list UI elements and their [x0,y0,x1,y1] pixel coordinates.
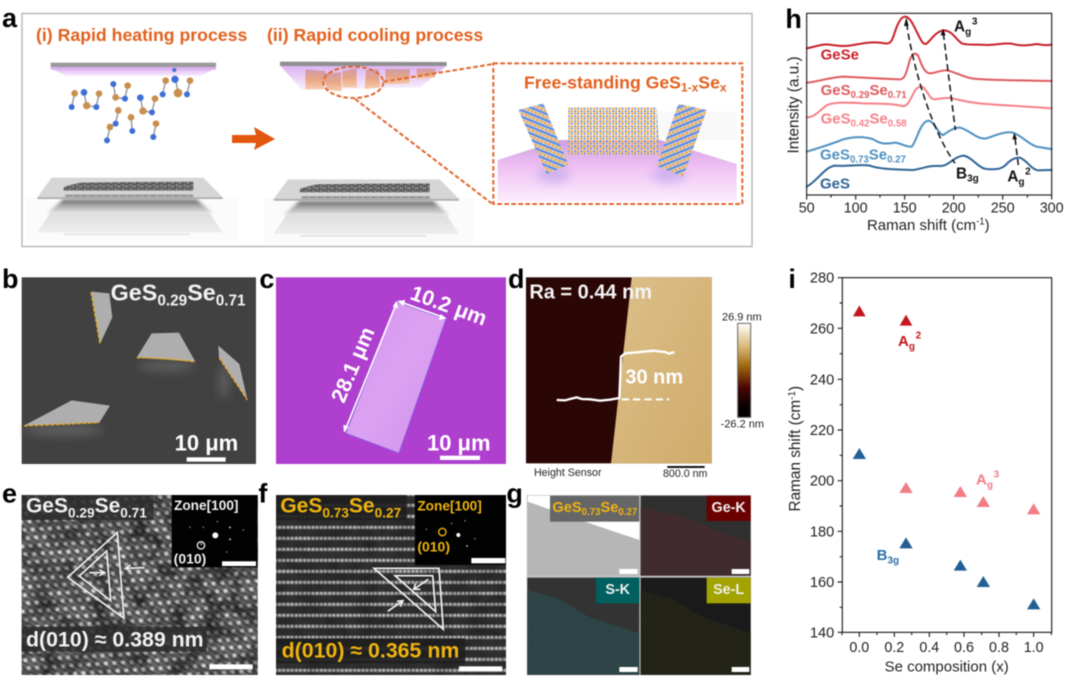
panel: i Raman shift vs composition [787,264,1052,676]
lower substrate with powder [264,179,474,243]
diffraction inset: (010) [417,539,450,555]
map: STEM image: 0.27 [618,507,637,518]
panel h letter: h [785,4,802,34]
series labels: GeS [821,110,851,127]
backdrop and separators [527,495,751,675]
y tick labels: 240 [810,372,834,388]
composition label: GeS [280,495,322,518]
scale bar [187,457,226,462]
composition label: 0.71 [216,293,246,310]
series labels: Se [869,146,887,163]
mode labels: A [1007,169,1018,186]
panel e letter: e [2,479,17,509]
series labels: GeS [820,175,850,192]
cooling stage illustration [264,62,742,243]
composition label: GeS [111,280,157,306]
composition label: 0.73 [322,505,349,520]
length label: 28.1 μm [326,324,380,406]
label: Ag2: g [909,341,915,352]
lattice flake right [657,104,707,177]
top substrate with flakes [280,62,447,91]
series labels: 0.29 [851,90,870,101]
panel: e HRTEM image [2,479,258,675]
step label: 30 nm [625,366,683,388]
y axis title: Intensity (a.u.) [785,56,802,154]
diffraction inset: Zone[100] [417,499,482,514]
curve: GeS0.73Se0.27 [807,121,1052,152]
panel a letter: a [2,3,18,33]
inset title: Free-standing GeS [524,72,681,92]
y tick labels: 280 [810,271,834,287]
x tick labels: 1.0 [1024,640,1044,656]
scale bar [209,664,253,669]
colour bar: 26.9 nm [722,312,762,324]
optical background [276,277,506,464]
diffraction inset: (010) [174,550,206,566]
x tick labels: 150 [893,201,917,217]
series labels: 0.73 [850,154,869,165]
y tick labels: 220 [810,423,834,439]
label: Ag2: A [898,333,909,350]
composition label: 0.71 [120,505,147,520]
heading: rapid heating: (i) Rapid heating process [36,25,247,45]
x tick labels: 0.6 [954,640,974,656]
panel g letter: g [506,479,523,509]
label: Ag3: g [987,480,993,491]
composition label: 0.27 [375,505,401,520]
triangle markers [374,568,443,629]
peak-shift dashed guides [907,23,1018,165]
inset title: x [720,81,727,95]
molecules [69,68,193,143]
x tick labels: 0.8 [989,640,1009,656]
panel f letter: f [258,478,268,508]
label: B3g: B [877,547,887,564]
panel: b SEM image [2,264,256,464]
panel: a [2,3,752,246]
mode labels: A [954,19,965,36]
mode labels [954,16,1031,188]
series labels: GeS [821,82,851,99]
diffraction inset [415,495,506,565]
y tick labels: 260 [810,321,834,337]
series labels [820,46,907,192]
composition label [22,495,153,520]
panel a frame [22,14,752,246]
curve: GeS [807,156,1052,187]
series labels: 0.42 [851,118,869,129]
x tick labels: 300 [1040,201,1064,217]
x tick labels [799,201,1064,217]
panel: g EDS maps [506,479,751,675]
top substrate [51,63,216,76]
inset title: 1-x [681,81,699,95]
scale label: 10 μm [427,431,491,456]
y tick labels: 180 [810,524,834,540]
curve: GeSe [807,17,1052,48]
inset backdrop [657,112,737,140]
SEM background [22,277,256,464]
flake tan region [611,277,712,463]
flake reflections [537,167,685,183]
series: B3g markers [853,448,1040,609]
scale bar [459,666,502,671]
flakes [24,292,247,426]
x axis title: Raman shift (cm [867,217,976,234]
x tick labels: 200 [942,201,966,217]
x axis title: -1 [976,217,985,228]
x tick labels: 0.4 [919,640,939,656]
panel b letter: b [2,264,18,294]
height trace [557,351,674,401]
label: Ag2: 2 [916,331,922,342]
mode labels: 3 [972,16,978,27]
label: Ag3: A [976,472,987,489]
series: Ag2 markers [853,305,912,326]
composition label: 0.29 [157,293,187,310]
diffraction inset: Zone[100] [174,498,239,513]
series labels: 0.71 [888,90,907,101]
heating stage illustration [27,63,237,242]
yellow dashed edges [24,292,247,426]
composition label: Se [95,495,120,518]
curve: GeS0.42Se0.58 [807,87,1052,117]
map: S-K [527,578,639,675]
substrate dark region [526,277,712,463]
scale label: 10 μm [175,431,238,456]
x tick labels: 0.2 [884,640,904,656]
d-spacing label: d(010) ≈ 0.389 nm [26,628,204,652]
y tick labels: 140 [810,625,834,641]
x tick labels: 100 [844,201,868,217]
y tick labels: 160 [810,575,834,591]
map: S-K: S-K [605,582,631,598]
series labels: 0.27 [887,154,906,165]
sensor label: Height Sensor [534,467,602,479]
map: STEM image: Se [600,500,618,516]
series labels: Se [869,82,888,99]
series labels: GeS [820,146,850,163]
label: B3g: 3g [887,555,899,566]
inset title: Se [698,72,720,92]
mode labels: g [965,27,971,38]
map: Se-L [641,578,751,675]
colour bar [721,312,764,430]
series labels: 0.58 [888,118,907,129]
y axis title: Raman shift (cm [787,400,804,511]
lattice flake left [518,103,568,174]
y axis title: -1 [787,391,798,400]
plot axes [838,278,1052,637]
x tick labels: 0.0 [849,640,869,656]
y tick labels [810,271,834,641]
heading: rapid cooling: (ii) Rapid cooling process [267,25,483,45]
y tick labels: 200 [810,474,834,490]
lower substrate with source powder [27,178,237,242]
composition label: Se [349,495,375,518]
composition label: Se [187,280,216,306]
arrow: process direction [232,127,275,150]
map: Ge-K [641,496,751,576]
x tick labels: 250 [991,201,1015,217]
x axis title: Se composition (x) [885,659,1009,676]
flake glows [23,361,229,435]
panel d letter: d [508,264,524,294]
diffraction inset [172,495,258,567]
lattice image [22,495,258,675]
x tick labels: 50 [799,201,815,217]
panel: h Raman spectra [785,4,1064,234]
series labels: GeSe [821,46,859,63]
composition label [276,495,407,520]
baseline dashes [622,396,669,402]
lattice image [276,495,506,675]
lattice block centre [568,107,659,155]
panel: c optical image [259,264,506,464]
inset frame [493,63,742,204]
plot axes [807,13,1052,200]
flake [346,302,446,453]
x axis title: ) [985,217,990,234]
series: Ag3 markers [899,482,1040,514]
panel c letter: c [259,264,274,294]
mode labels: g [1018,177,1025,188]
map: Ge-K: Ge-K [712,500,746,516]
width label: 10.2 μm [407,281,490,331]
scale bar [667,466,705,468]
series labels: Se [869,110,888,127]
y axis title: ) [787,386,804,391]
inset floor [498,140,737,202]
map: STEM image: 0.73 [582,507,601,518]
composition label: 0.29 [68,505,95,520]
inset: free-standing GeS1-xSex [493,63,742,204]
mode labels: 3g [967,174,979,185]
panel i letter: i [788,264,796,294]
curve: GeS0.29Se0.71 [807,54,1052,83]
panel: d AFM image [508,264,764,480]
composition label: GeS [26,495,68,518]
guide arrowheads [904,17,1017,139]
mode labels: B [956,165,967,182]
label: Ag3: 3 [994,469,1000,480]
zoom callout ellipse and lines [323,64,493,203]
dimension arrows [343,300,447,433]
scale bar [440,456,480,460]
mode labels: 2 [1025,166,1031,177]
triangle markers [68,532,145,618]
panel: f HRTEM image [258,478,506,675]
x tick labels [849,640,1044,656]
d-spacing label: d(010) ≈ 0.365 nm [282,638,459,662]
spectra curves [807,17,1052,187]
map: Se-L: Se-L [713,582,744,598]
height label: Ra = 0.44 nm [529,281,652,303]
map: STEM image: GeS [552,500,582,516]
scale label: 800.0 nm [663,468,708,480]
colour bar: -26.2 nm [721,418,764,430]
map: STEM image [528,496,639,576]
